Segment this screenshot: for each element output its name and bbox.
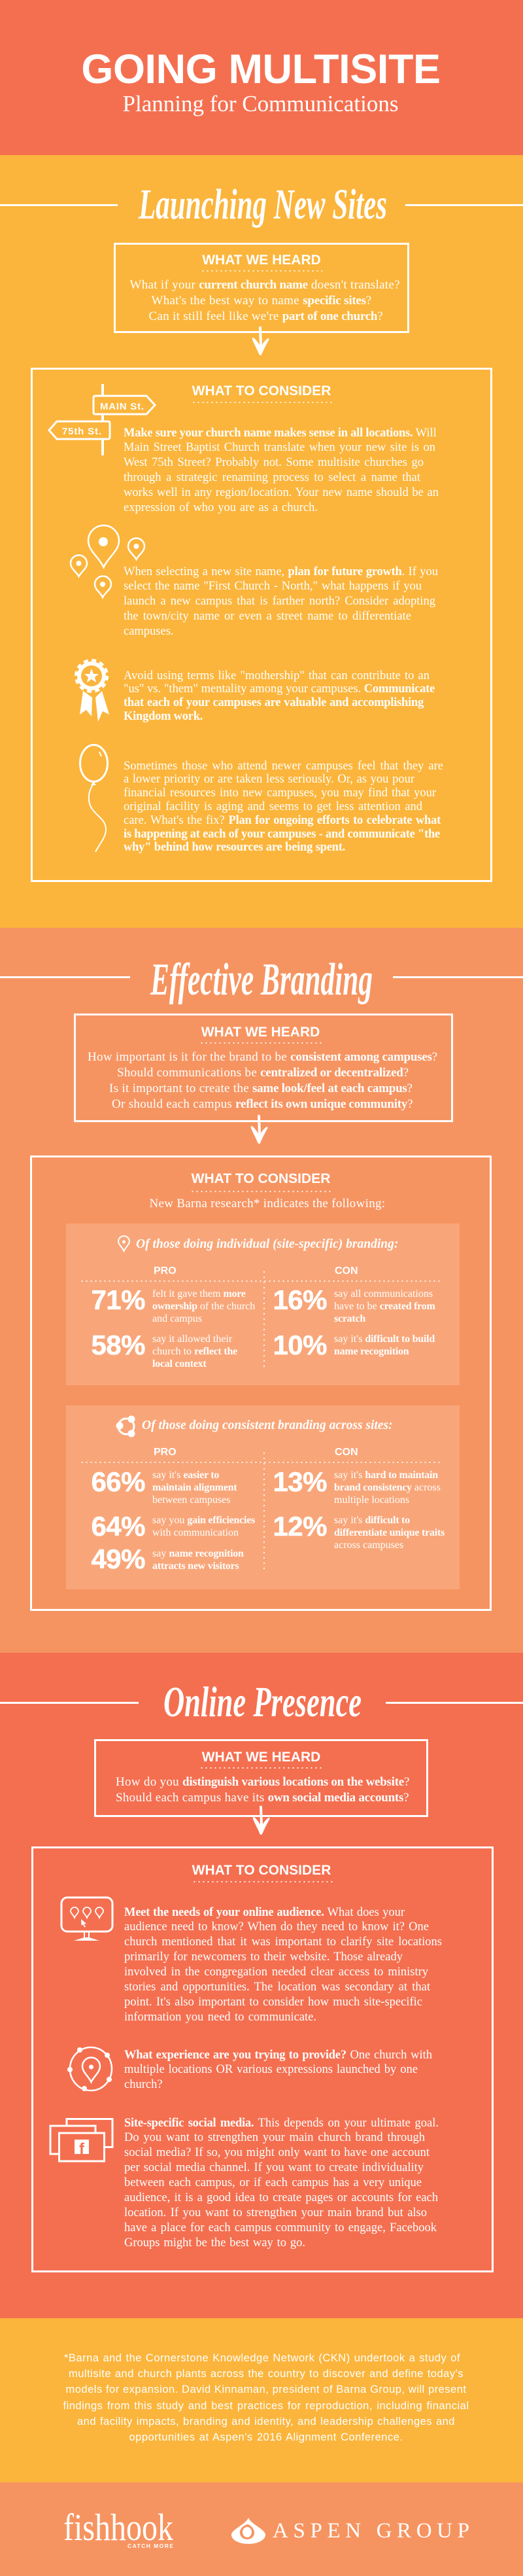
text: mothership: Kingdom work. [124,710,203,723]
text: online audience [124,1905,442,2024]
icon: monitor with pins [60,1896,114,1941]
questions: How important is it for the brand to be consistent among campuses? [88,1050,437,1064]
text: future growth: launch a new campus that is farther north? Consider adopting [124,595,435,608]
text: social media: location. If you want to strengthen your main brand but also [124,2206,427,2219]
panel heading: Of those doing individual (site-specific) branding: [136,1237,398,1251]
arrow [252,1806,269,1835]
panel: what we heard [74,1014,453,1122]
heading: what we heard: WHAT WE HEARD [202,1750,320,1765]
heading: effective branding: Effective Branding [150,955,373,1005]
panel: what to consider [30,1156,492,1611]
questions [129,278,400,323]
stat text: name recognition [334,1345,409,1357]
text: online audience: primarily for newcomers to their website. Those already [124,1950,403,1964]
icon: balloon [79,744,109,852]
text: mothership: that each of your campuses are valuable and accomplishing [124,696,424,709]
text: experience: multiple locations OR various expressions launched by one [124,2063,418,2076]
stat 16%: 16% [273,1284,327,1315]
text: social media: Groups might be the best way to go. [124,2236,305,2250]
stat text: say all communications [334,1288,433,1299]
text: social media: Site-specific social media. This depends on your ultimate goal. [124,2116,439,2129]
icon: award ribbon [75,659,109,722]
icon: street signs: 75th St. [62,426,101,437]
dotted rule [192,1881,334,1882]
section: launching new sites [0,155,523,928]
icon: social media pages: f [79,2140,85,2158]
stat 12%: 12% [273,1511,327,1542]
section: online presence [0,1653,523,2318]
text: future growth: When selecting a new site name, plan for future growth. If you [124,565,438,578]
stat text: say it's difficult to build [334,1333,435,1344]
panel: what we heard [94,1739,428,1817]
heading: what to consider: WHAT TO CONSIDER [192,1171,330,1186]
stat text [152,1333,237,1369]
column head: con: CON [335,1447,358,1458]
text: mothership: "us" vs. "them" mentality among your campuses. Communicate [124,682,435,696]
stat text [152,1470,237,1505]
heading: what to consider: WHAT TO CONSIDER [192,1863,331,1878]
heading: online presence: Online Presence [163,1678,362,1726]
footnote text: *Barna and the Cornerstone Knowledge Network (CKN) undertook a study of [64,2352,460,2364]
questions: Can it still feel like we're part of one church? [149,309,383,323]
questions: Or should each campus reflect its own unique community? [112,1097,413,1111]
text: online audience: point. It's also important to consider how much site-specific [124,1996,422,2009]
text: online audience: information you need to communicate. [124,2011,316,2024]
dotted rule [199,1042,322,1044]
stat text: say it's hard to maintain [334,1470,438,1480]
text: newer campuses: original facility is aging and seems to get less attention and [124,800,422,813]
intro text: New Barna research* indicates the following: [149,1197,385,1210]
section: effective branding [0,928,523,1653]
stat text: have to be created from [334,1301,435,1311]
text: experience: church? [124,2078,163,2091]
stat text: local context [152,1358,207,1369]
text: social media: social media? If so, you might only want to have one account [124,2146,430,2159]
text: future growth: the town/city name or even a street name to differentiate [124,610,411,623]
questions: What if your current church name doesn't translate? [129,278,400,292]
column head: pro: PRO [154,1447,177,1458]
heading: online presence [0,1678,523,1726]
stat text: felt it gave them more [152,1288,246,1299]
text: church name: works well in any region/location. Your new name should be an [124,486,439,499]
text: church name [124,427,439,514]
stat text: attracts new visitors [152,1560,239,1572]
heading: effective branding [0,955,523,1005]
stat text: ownership of the church [152,1301,255,1311]
subtitle: Planning for Communications [123,91,398,116]
logo: fishhook: fishhook [63,2506,173,2549]
panel: what we heard [114,243,409,333]
footnote text [63,2352,469,2443]
stat text: church to reflect the [152,1345,237,1357]
stat text: say it's difficult to [334,1514,410,1526]
text: church name: through a strategic renaming process to select a name that [124,471,420,484]
logo band [0,2482,523,2576]
stat text: scratch [334,1313,365,1324]
arrow [252,326,269,356]
text: mothership [124,669,435,723]
stat 10%: 10% [273,1330,327,1360]
text: online audience: Meet the needs of your online audience. What does your [124,1905,405,1918]
title: GOING MULTISITE [81,46,441,92]
heading: what we heard: WHAT WE HEARD [201,1025,320,1040]
dotted divider [263,1269,265,1370]
text: experience: What experience are you trying to provide? One church with [124,2048,432,2061]
stat 66%: 66% [91,1466,145,1497]
panel: consistent branding stats [66,1405,460,1589]
text: church name: West 75th Street? Probably not. Some multisite churches go [124,456,424,469]
column head: pro: PRO [154,1265,177,1277]
icon: social media pages [50,2118,114,2162]
stat text: say you gain efficiencies [152,1514,255,1526]
text: future growth: campuses. [124,625,174,638]
text: social media [124,2116,439,2250]
icon: street signs: MAIN St. [100,401,144,412]
text: online audience: stories and opportunities. The location was secondary at that [124,1981,430,1994]
text: church name: expression of who you are as a church. [124,501,318,514]
icon: street signs [48,384,156,455]
stat 13%: 13% [273,1466,327,1497]
dotted rule [80,1280,443,1282]
text: online audience: church mentioned that it was important to clarify site locations [124,1935,442,1949]
stat text [334,1470,441,1505]
stat text: between campuses [152,1494,231,1505]
stat text: maintain alignment [152,1481,237,1493]
stat 64%: 64% [91,1511,145,1542]
dotted rule [199,1767,322,1769]
logo: aspen group: ASPEN GROUP [273,2519,469,2543]
stat text: differentiate unique traits [334,1527,445,1538]
footnote text: opportunities at Aspen's 2016 Alignment Conference. [129,2431,403,2443]
questions [88,1050,437,1111]
panel: individual branding stats [66,1224,460,1385]
panel: what to consider [31,1846,494,2272]
heading: launching new sites: Launching New Sites [138,181,387,228]
text: newer campuses: is happening at each of your campuses - and communicate "the [124,828,440,841]
stat text: say it's easier to [152,1470,219,1480]
footnote text: models for expansion. David Kinnaman, president of Barna Group, will present [65,2384,467,2395]
text: online audience: audience need to know? When do they need to know it? One [124,1920,429,1933]
text: newer campuses: a lower priority or are taken less seriously. Or, as you pour [124,773,414,786]
footnote text: and facility impacts, branding and identity, and leadership challenges and [77,2416,455,2427]
questions: What's the best way to name specific sites? [152,294,371,308]
panel heading: Of those doing consistent branding across sites: [142,1419,393,1432]
stat text [334,1514,445,1551]
text: experience [124,2048,432,2091]
text: newer campuses: financial resources into new campuses, you may find that your [124,786,436,800]
text: social media: Do you want to strengthen your main church brand through [124,2131,425,2144]
footnote text: findings from this study and best practices for reproduction, including financial [63,2400,469,2412]
text: social media: audience, it is a good idea to create pages or accounts for each [124,2191,438,2204]
text: mothership: Avoid using terms like "mothership" that can contribute to an [124,669,430,682]
column head: con: CON [335,1265,358,1277]
text: social media: have a place for each campus community to engage, Facebook [124,2221,437,2234]
stat text: say it allowed their [152,1333,232,1344]
text: future growth [124,565,438,638]
questions [116,1775,410,1805]
text: newer campuses: Sometimes those who attend newer campuses feel that they are [124,760,443,773]
text: newer campuses [124,760,443,854]
footnote band [0,2318,523,2482]
stat text [152,1288,255,1324]
questions: Should each campus have its own social media accounts? [116,1791,409,1805]
dotted rule [192,402,333,403]
icon: pin in orbit [67,2047,112,2091]
dotted divider [263,1451,265,1572]
text: newer campuses: care. What's the fix? Plan for ongoing efforts to celebrate what [124,814,441,827]
stat text: with communication [152,1527,239,1538]
footnote text: multisite and church plants across the country to discover and define today's [69,2368,464,2380]
panel: what to consider [31,368,492,882]
heading: what to consider: WHAT TO CONSIDER [192,383,331,398]
questions: How do you distinguish various locations on the website? [116,1775,410,1789]
dotted rule [80,1462,443,1463]
stat 71%: 71% [91,1284,145,1315]
questions: Should communications be centralized or decentralized? [117,1066,409,1080]
text: church name: Main Street Baptist Church translate when your new site is on [124,441,435,454]
stat text [152,1548,244,1572]
arrow [251,1115,268,1144]
text: church name: Make sure your church name makes sense in all locations. Will [124,427,437,440]
stat text [334,1333,435,1357]
dotted rule [190,1191,333,1192]
icon: map pins [69,525,145,599]
text: social media: per social media channel. If you want to create individuality [124,2161,424,2174]
stat text: multiple locations [334,1494,409,1505]
stat text: brand consistency across [334,1481,441,1493]
text: online audience: involved in the congregation needed clear access to ministry [124,1966,428,1979]
stat 58%: 58% [91,1330,145,1360]
icon: connected sites [116,1416,135,1437]
header band [0,0,523,155]
stat text: across campuses [334,1539,403,1551]
text: future growth: select the name "First Church - North," what happens if you [124,580,422,593]
stat text: say name recognition [152,1548,244,1559]
icon: pin [118,1235,130,1252]
text: social media: between each campus, or if each campus has a very unique [124,2176,422,2189]
logo: fishhook: CATCH MORE [127,2543,173,2549]
stat text [334,1288,435,1324]
stat 49%: 49% [91,1544,145,1574]
text: newer campuses: why" behind how resources are being spent. [124,841,345,854]
dotted rule [201,270,322,272]
questions: Is it important to create the same look/feel at each campus? [109,1082,413,1095]
stat text [152,1514,255,1538]
heading: what we heard: WHAT WE HEARD [202,253,321,268]
stat text: and campus [152,1313,202,1324]
